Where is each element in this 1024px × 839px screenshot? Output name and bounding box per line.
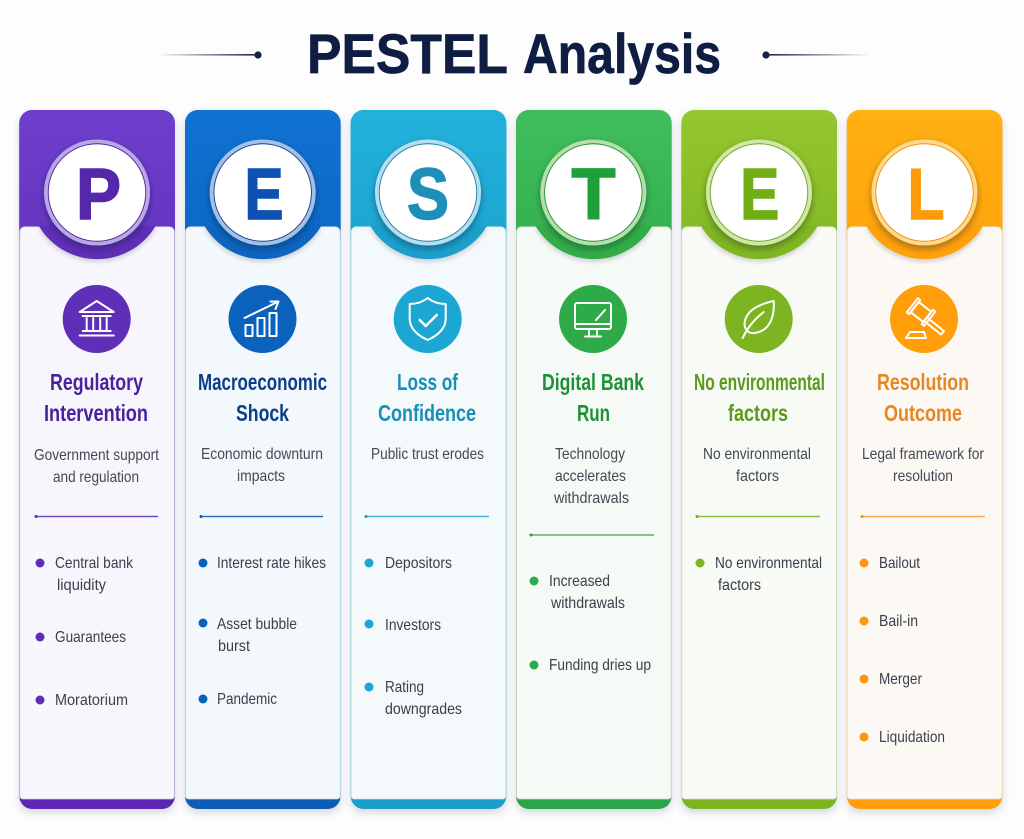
bullet list: Liquidation bbox=[879, 729, 945, 746]
card shape bbox=[19, 110, 175, 809]
bullet list: Depositors bbox=[385, 555, 452, 572]
letter badge: T: T bbox=[572, 155, 616, 235]
card shape bbox=[516, 110, 672, 809]
bullet list: Merger bbox=[879, 671, 923, 688]
heading bbox=[877, 369, 969, 426]
panel: T Technological bbox=[516, 110, 672, 809]
heading bbox=[542, 369, 644, 426]
card shape bbox=[185, 110, 341, 809]
description bbox=[34, 447, 159, 486]
letter badge: S: S bbox=[407, 155, 449, 235]
icon: bank bbox=[63, 285, 131, 353]
heading: Intervention bbox=[44, 400, 148, 426]
bullet list: withdrawals bbox=[550, 595, 625, 612]
description bbox=[201, 446, 323, 485]
letter badge: T bbox=[540, 140, 646, 246]
divider bbox=[860, 515, 985, 518]
letter badge: P: P bbox=[76, 155, 121, 235]
description bbox=[703, 446, 811, 485]
divider bbox=[34, 515, 158, 518]
heading bbox=[198, 369, 327, 426]
bullet list bbox=[696, 555, 822, 594]
description: Technology bbox=[555, 446, 625, 463]
heading: Digital Bank bbox=[542, 369, 644, 395]
heading: Confidence bbox=[378, 400, 476, 426]
bullet list bbox=[530, 573, 651, 674]
title: Analysis bbox=[523, 22, 721, 85]
description bbox=[862, 446, 985, 485]
heading: Resolution bbox=[877, 369, 969, 395]
bullet list: No environmental bbox=[715, 555, 822, 572]
bullet list bbox=[36, 555, 134, 709]
letter badge: P bbox=[44, 140, 150, 246]
letter badge: E: E bbox=[740, 155, 779, 235]
letter badge: L: L bbox=[908, 155, 944, 235]
divider bbox=[200, 515, 323, 518]
bullet list: factors bbox=[718, 577, 761, 594]
card shape bbox=[351, 110, 506, 809]
bullet list: Investors bbox=[385, 617, 441, 634]
divider bbox=[696, 515, 820, 518]
title: PESTEL bbox=[307, 22, 508, 85]
description: withdrawals bbox=[553, 490, 629, 507]
description: Economic downturn bbox=[201, 446, 323, 463]
divider bbox=[364, 515, 489, 518]
heading: Macroeconomic bbox=[198, 369, 327, 395]
bullet list: burst bbox=[218, 638, 250, 655]
description: Government support bbox=[34, 447, 159, 464]
description: resolution bbox=[893, 468, 953, 485]
bullet list bbox=[364, 555, 462, 718]
letter badge: E bbox=[210, 140, 316, 246]
heading: No environmental bbox=[694, 369, 825, 395]
panel: S Social bbox=[351, 110, 506, 809]
panel: L Legal bbox=[847, 110, 1002, 809]
bullet list: downgrades bbox=[385, 701, 462, 718]
letter badge: S bbox=[375, 140, 481, 246]
heading: Run bbox=[577, 400, 610, 426]
icon: shield bbox=[394, 285, 462, 353]
letter badge: E: E bbox=[244, 155, 284, 235]
bullet list: Moratorium bbox=[55, 692, 128, 709]
bullet list: Central bank bbox=[55, 555, 134, 572]
bullet list: Pandemic bbox=[217, 691, 277, 708]
panel: E Economic bbox=[185, 110, 341, 809]
heading: Loss of bbox=[397, 369, 458, 395]
heading bbox=[694, 369, 825, 426]
bullet list: liquidity bbox=[57, 577, 106, 594]
icon: gavel bbox=[890, 285, 958, 353]
bullet list: Rating bbox=[385, 679, 424, 696]
title bbox=[307, 22, 721, 85]
divider bbox=[530, 534, 654, 536]
left title ornament bbox=[157, 51, 262, 59]
description: No environmental bbox=[703, 446, 811, 463]
description: accelerates bbox=[555, 468, 626, 485]
bullet list bbox=[198, 555, 326, 708]
heading: Shock bbox=[236, 400, 289, 426]
icon: leaf bbox=[725, 285, 793, 353]
panel: P Political bbox=[19, 110, 175, 809]
description: factors bbox=[736, 468, 779, 485]
letter badge: E bbox=[706, 140, 812, 246]
heading: factors bbox=[728, 400, 788, 426]
heading: Outcome bbox=[884, 400, 962, 426]
card shape bbox=[681, 110, 837, 809]
icon: rising chart bbox=[228, 285, 296, 353]
letter badge: L bbox=[872, 140, 978, 246]
description: impacts bbox=[237, 468, 285, 485]
icon: computer monitor bbox=[559, 285, 627, 353]
bullet list: Increased bbox=[549, 573, 610, 590]
heading bbox=[378, 369, 476, 426]
bullet list bbox=[860, 555, 945, 746]
bullet list: Funding dries up bbox=[549, 657, 651, 674]
panel: E Environmental bbox=[681, 110, 837, 809]
card shape bbox=[847, 110, 1002, 809]
heading: Regulatory bbox=[50, 369, 143, 395]
bullet list: Bailout bbox=[879, 555, 920, 572]
description: Public trust erodes bbox=[371, 446, 484, 463]
description: Legal framework for bbox=[862, 446, 985, 463]
bullet list: Interest rate hikes bbox=[217, 555, 326, 572]
bullet list: Asset bubble bbox=[217, 616, 297, 633]
description: and regulation bbox=[53, 469, 139, 486]
description bbox=[553, 446, 629, 507]
heading bbox=[44, 369, 148, 426]
bullet list: Bail-in bbox=[879, 613, 918, 630]
right title ornament bbox=[762, 51, 870, 59]
bullet list: Guarantees bbox=[55, 629, 126, 646]
